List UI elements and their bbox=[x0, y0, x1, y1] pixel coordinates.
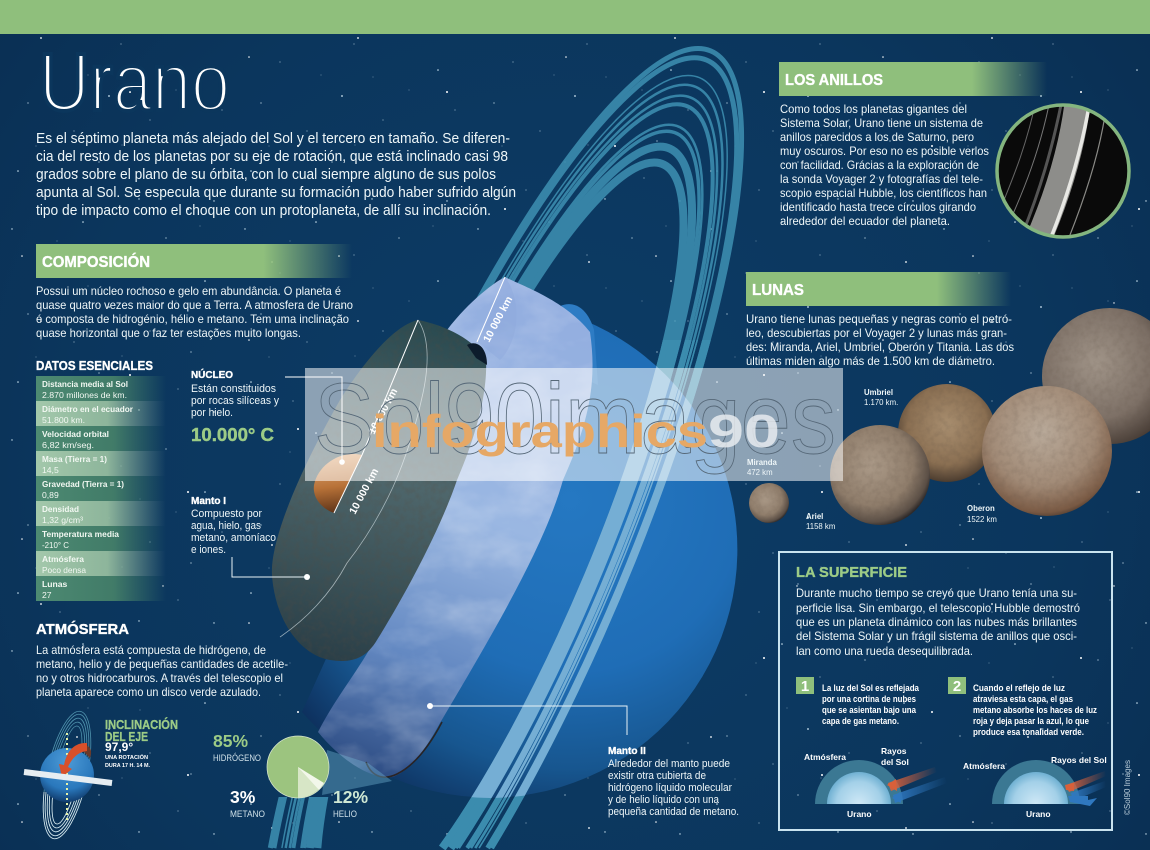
label: Oberon: 1522 km bbox=[967, 515, 997, 524]
heading: los anillos: LOS ANILLOS bbox=[785, 72, 883, 89]
Manto I slice bbox=[272, 320, 487, 661]
panel text: del Sistema Solar y un frágil sistema de anillos que osci- bbox=[796, 629, 1077, 643]
manto II leader line bbox=[427, 703, 627, 735]
label: Ariel: Ariel bbox=[806, 512, 823, 521]
manto II callout: pequeña cantidad de metano. bbox=[608, 806, 739, 818]
manto I callout: Compuesto por bbox=[191, 508, 262, 520]
panel text: perficie lisa. Sin embargo, el telescopio Hubble demostró bbox=[796, 601, 1080, 615]
table text: Velocidad orbital bbox=[42, 429, 109, 439]
table text: 27 bbox=[42, 590, 52, 600]
table text: Atmósfera bbox=[42, 554, 84, 564]
moon labels bbox=[747, 388, 997, 531]
los anillos text: Sistema Solar, Urano tiene un sistema de bbox=[780, 116, 983, 130]
los anillos text bbox=[780, 102, 989, 228]
top green band bbox=[0, 0, 1150, 34]
heading: composición bbox=[36, 244, 352, 278]
Manto II slice bbox=[318, 277, 593, 777]
heading: lunas: LUNAS bbox=[752, 282, 804, 299]
manto I callout: Manto I bbox=[191, 496, 226, 507]
temperature: 10.000° C bbox=[191, 425, 274, 445]
planet rings behind the planet bbox=[270, 49, 742, 848]
title: Urano bbox=[39, 37, 230, 128]
atmósfera section: no y otros hidrocarburos. A través del telescopio el bbox=[36, 671, 283, 685]
moon: Titania bbox=[1042, 308, 1150, 444]
núcleo callout: NÚCLEO bbox=[191, 368, 233, 381]
85% label: 85% bbox=[213, 731, 248, 751]
planet Uranus cutaway illustration bbox=[272, 277, 737, 798]
núcleo callout: por rocas silíceas y bbox=[191, 395, 279, 407]
table rows bbox=[36, 376, 166, 601]
step 2: produce esa tonalidad verde. bbox=[973, 727, 1084, 737]
measure line: inner 10 000 km: 10 000 km bbox=[347, 466, 381, 516]
3% label: METANO bbox=[230, 809, 265, 819]
heading: lunas bbox=[746, 272, 1011, 306]
85% label bbox=[213, 731, 261, 763]
table text: Distancia media al Sol bbox=[42, 379, 128, 389]
diagram 1: Atmósfera bbox=[804, 752, 846, 762]
step 1: que se asientan bajo una bbox=[822, 705, 917, 715]
moon: Oberon bbox=[982, 386, 1112, 516]
los anillos text: alrededor del ecuador del planeta. bbox=[780, 214, 950, 228]
moon: Miranda bbox=[749, 483, 789, 523]
table text: 14,5 bbox=[42, 465, 59, 475]
85% label: HIDRÓGENO bbox=[213, 753, 261, 763]
inclinación del eje text: INCLINACIÓN bbox=[105, 717, 178, 732]
step 2: roja y deja pasar la azul, lo que bbox=[973, 716, 1089, 726]
los anillos text: la sonda Voyager 2 y fotografías del tele- bbox=[780, 172, 983, 186]
inclinación del eje text bbox=[105, 717, 178, 769]
table text: 2.870 millones de km. bbox=[42, 390, 127, 400]
table text: Gravedad (Tierra = 1) bbox=[42, 479, 124, 489]
atmósfera section: metano, helio y de pequeñas cantidades de acetile- bbox=[36, 657, 288, 671]
intro text: tipo de impacto como el choque con un protoplaneta, de allí su inclinación. bbox=[36, 203, 491, 219]
measure line: outer 10 000 km: 10 000 km bbox=[481, 294, 515, 344]
diagram 2: Urano bbox=[1026, 809, 1051, 819]
núcleo callout bbox=[191, 368, 279, 445]
manto II callout: y de helio líquido con una bbox=[608, 794, 720, 806]
pie chart: atmosphere composition bbox=[213, 731, 392, 819]
manto II callout: existir otra cubierta de bbox=[608, 770, 706, 782]
los anillos text: con facilidad. Grácias a la exploración de bbox=[780, 158, 979, 172]
lunas text: Urano tiene lunas pequeñas y negras como el petró- bbox=[746, 312, 1012, 326]
diagram 1 bbox=[804, 748, 942, 817]
step 2: 2 bbox=[953, 678, 961, 695]
watermark orange wordmark: 90 bbox=[708, 405, 780, 457]
label: Miranda bbox=[747, 458, 778, 477]
watermark orange wordmark bbox=[372, 405, 780, 457]
table text: Temperatura media bbox=[42, 529, 119, 539]
heading: los anillos bbox=[779, 62, 1047, 96]
photo: rings close-up bbox=[997, 100, 1129, 245]
los anillos text: identificado hasta trece círculos girando bbox=[780, 200, 976, 214]
table text: Diámetro en el ecuador bbox=[42, 404, 134, 414]
label: Oberon: Oberon bbox=[967, 504, 995, 513]
step 1: 1 bbox=[801, 678, 809, 695]
manto II callout: Alrededor del manto puede bbox=[608, 758, 730, 770]
diagram 1: del Sol bbox=[881, 757, 909, 767]
inclinación del eje text: 97,9° bbox=[105, 740, 133, 754]
lunas text bbox=[746, 312, 1014, 368]
beam to the planet bbox=[322, 750, 392, 795]
manto I callout: e iones. bbox=[191, 544, 226, 556]
step 1: por una cortina de nubes bbox=[822, 694, 916, 704]
manto I callout bbox=[191, 496, 276, 556]
manto II callout: Manto II bbox=[608, 746, 646, 757]
3% label: 3% bbox=[230, 787, 256, 807]
table text bbox=[42, 379, 134, 600]
label: Ariel: 1158 km bbox=[806, 522, 835, 531]
table text: Densidad bbox=[42, 504, 79, 514]
credit: ©Sol90 Images bbox=[1122, 760, 1132, 815]
table text: Poco densa bbox=[42, 565, 86, 575]
los anillos text: anillos parecidos a los de Saturno, pero bbox=[780, 130, 974, 144]
manto II callout: hidrógeno líquido molecular bbox=[608, 782, 732, 794]
watermark outline wordmark: Sol90images bbox=[314, 363, 836, 475]
intro text: Es el séptimo planeta más alejado del Sol y el tercero en tamaño. Se diferen- bbox=[36, 131, 510, 147]
label: Miranda: Miranda bbox=[747, 458, 778, 467]
núcleo callout: por hielo. bbox=[191, 407, 233, 419]
step 2: atraviesa esta capa, el gas bbox=[973, 694, 1073, 704]
table text: Masa (Tierra = 1) bbox=[42, 454, 107, 464]
label: Oberon bbox=[967, 504, 997, 524]
table text: 6,82 km/seg. bbox=[42, 440, 94, 450]
intro text: grados sobre el plano de su órbita, con lo cual siempre alguno de sus polos bbox=[36, 167, 496, 183]
inclinación del eje text: UNA ROTACIÓN bbox=[105, 753, 148, 761]
inclinación del eje text: DEL EJE bbox=[105, 730, 148, 744]
inclinación del eje text: DURA 17 H. 14 M. bbox=[105, 763, 150, 769]
label: Umbriel bbox=[864, 388, 898, 407]
atmósfera section: planeta aparece como un disco verde azulado. bbox=[36, 685, 261, 699]
panel text bbox=[796, 586, 1080, 658]
manto II callout bbox=[608, 746, 739, 818]
diagram 2: Atmósfera bbox=[963, 761, 1005, 771]
panel heading: LA SUPERFICIE bbox=[796, 564, 907, 581]
step 1: capa de gas metano. bbox=[822, 716, 899, 726]
los anillos text: scopio espacial Hubble, los científicos han bbox=[780, 186, 987, 200]
composición text: Possui um núcleo rochoso e gelo em abundância. O planeta é bbox=[36, 284, 341, 298]
atmósfera section: La atmósfera está compuesta de hidrógeno, de bbox=[36, 643, 266, 657]
moon: Ariel bbox=[830, 425, 930, 525]
moon: Umbriel bbox=[898, 384, 996, 482]
measure line: middle 10 000 km bbox=[362, 320, 418, 455]
datos esenciales table bbox=[36, 359, 166, 601]
table text: -210° C bbox=[42, 540, 69, 550]
intro text: apunta al Sol. Se especula que durante su formación pudo haber sufrido algún bbox=[36, 185, 516, 201]
intro text: cia del resto de los planetas por su eje de rotación, que está inclinado casi 98 bbox=[36, 149, 508, 165]
watermark orange wordmark: infographics bbox=[372, 405, 708, 457]
lunas text: leo, descubiertas por el Voyager 2 y lunas más gran- bbox=[746, 326, 1007, 340]
atmósfera section bbox=[36, 620, 288, 699]
table text: 0,89 bbox=[42, 490, 59, 500]
heading: composición: COMPOSICIÓN bbox=[42, 253, 150, 271]
table heading: DATOS ESENCIALES bbox=[36, 359, 153, 373]
núcleo callout: Están constituidos bbox=[191, 383, 276, 395]
table text: 51.800 km. bbox=[42, 415, 85, 425]
núcleo leader line bbox=[285, 377, 345, 465]
step 1: La luz del Sol es reflejada bbox=[822, 683, 920, 693]
rings in front of the planet bbox=[439, 340, 711, 850]
watermark panel bbox=[305, 363, 843, 481]
panel: la superficie bbox=[779, 552, 1112, 848]
diagram 1: Urano bbox=[847, 809, 872, 819]
composición text: quase quatro vezes maior do que a Terra. A atmosfera de Urano bbox=[36, 298, 353, 312]
label: Umbriel: Umbriel bbox=[864, 388, 893, 397]
atmósfera section: ATMÓSFERA bbox=[36, 620, 130, 638]
los anillos text: muy oscuros. Por eso no es posible verlos bbox=[780, 144, 989, 158]
outer blue sphere bbox=[302, 304, 737, 798]
step 2: metano absorbe los haces de luz bbox=[973, 705, 1097, 715]
step 2 bbox=[948, 677, 1097, 737]
lunas text: des: Miranda, Ariel, Umbriel, Oberón y Titania. Las dos bbox=[746, 340, 1014, 354]
composición text bbox=[36, 284, 353, 340]
panel text: Durante mucho tiempo se creyó que Urano tenía una su- bbox=[796, 586, 1077, 600]
lunas text: últimas miden algo más de 1.500 km de diámetro. bbox=[746, 354, 995, 368]
los anillos text: Como todos los planetas gigantes del bbox=[780, 102, 967, 116]
table text: Lunas bbox=[42, 579, 68, 589]
12% label: HELIO bbox=[333, 809, 357, 819]
measure line: outer 10 000 km bbox=[477, 277, 515, 344]
step 1 bbox=[796, 677, 920, 726]
step 2: Cuando el reflejo de luz bbox=[973, 683, 1065, 693]
diagram 2 bbox=[963, 757, 1106, 817]
manto I callout: agua, hielo, gas bbox=[191, 520, 261, 532]
12% label: 12% bbox=[333, 787, 368, 807]
measure line: inner 10 000 km bbox=[334, 455, 381, 516]
core bbox=[314, 454, 362, 513]
label: Ariel bbox=[806, 512, 835, 531]
12% label bbox=[333, 787, 368, 819]
panel text: lan como una rueda desequilibrada. bbox=[796, 644, 973, 658]
manto I callout: metano, amoníaco bbox=[191, 532, 276, 544]
diagram 1: Rayos bbox=[881, 746, 907, 756]
manto I leader line bbox=[232, 557, 310, 580]
panel text: que es un planeta dinámico con las nubes más brillantes bbox=[796, 615, 1077, 629]
icon: axis tilt bbox=[24, 707, 112, 843]
3% label bbox=[230, 787, 265, 819]
diagram 2: Rayos del Sol bbox=[1051, 755, 1107, 765]
table text: 1,32 g/cm³ bbox=[42, 515, 83, 525]
label: Umbriel: 1.170 km. bbox=[864, 398, 898, 407]
intro text bbox=[36, 131, 516, 219]
label: Miranda: 472 km bbox=[747, 468, 773, 477]
measure line: middle 10 000 km: 10 000 km bbox=[366, 386, 400, 436]
composición text: quase horizontal que o faz ter estações muito longas. bbox=[36, 326, 301, 340]
composición text: é composta de hidrogénio, hélio e metano. Tem uma inclinação bbox=[36, 312, 349, 326]
